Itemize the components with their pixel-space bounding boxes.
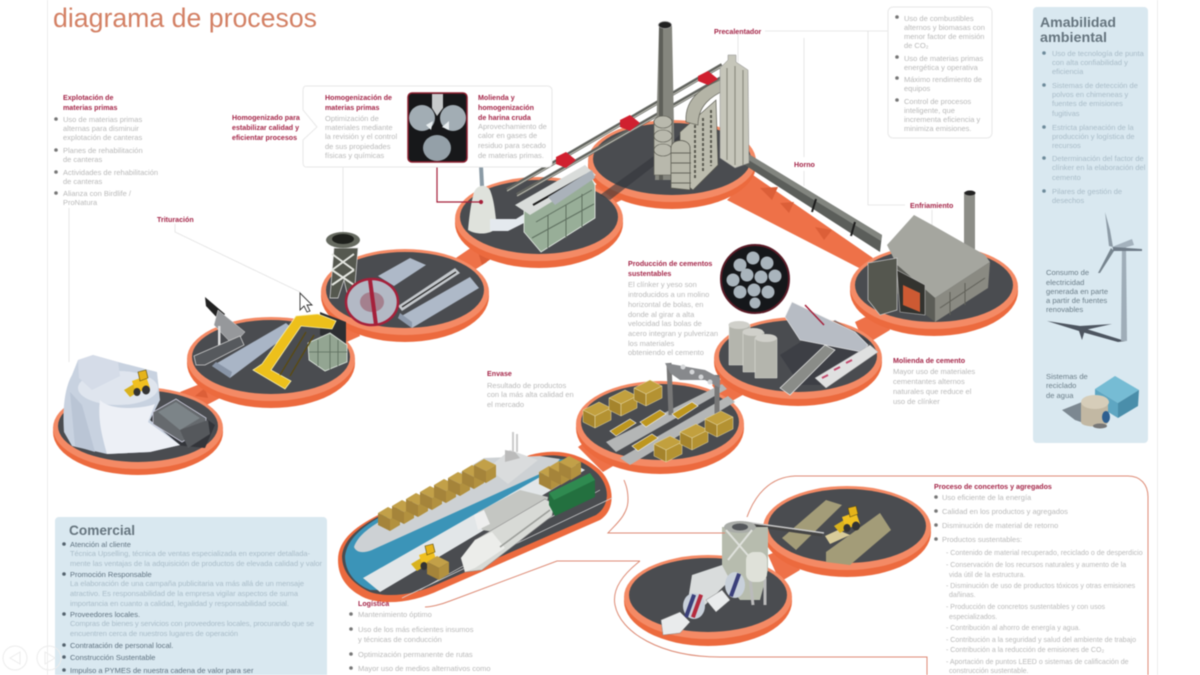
icon: player controls xyxy=(3,646,61,670)
illustration: precalentador xyxy=(600,22,749,200)
heading: horno: Horno xyxy=(794,161,816,169)
cursor xyxy=(300,293,312,312)
text: produccion: introducidos a un molino xyxy=(628,290,709,299)
panel: comercial: Compras de bienes y servicios con proveedores locales, procurando que se xyxy=(70,619,314,628)
panel: amabilidad ambiental: polvos en chimeneas y xyxy=(1052,90,1129,99)
illustration: concretos xyxy=(745,500,891,565)
panel: precalentador: Uso de combustibles xyxy=(904,14,974,23)
icon: water recycling xyxy=(1062,376,1139,428)
panel: homogenizacion: de harina cruda xyxy=(478,114,531,122)
disc: concretos xyxy=(763,486,931,577)
heading: precalentador: Precalentador xyxy=(714,28,762,36)
panel: precalentador: de CO₂ xyxy=(904,41,929,50)
text: proceso de concretos: - Aportación de puntos LEED o sistemas de calificación de xyxy=(946,659,1129,666)
panel: precalentador xyxy=(888,7,992,138)
locomotive xyxy=(461,499,554,572)
panel: amabilidad ambiental: cemento xyxy=(1052,173,1081,182)
text: proceso de concretos: - Producción de concretos sustentables y con usos xyxy=(946,604,1106,611)
inset: molino xyxy=(408,93,467,162)
panel: amabilidad ambiental: ambiental xyxy=(1040,29,1107,45)
leader lines xyxy=(69,31,932,362)
panel: amabilidad ambiental: renovables xyxy=(1046,305,1083,314)
panel: amabilidad ambiental: Uso de tecnología de punta xyxy=(1052,49,1145,58)
icon: wind turbine xyxy=(1047,212,1142,342)
panel: precalentador: equipos xyxy=(904,84,931,93)
text: explotacion: Alianza con Birdlife / xyxy=(63,189,132,198)
panel: amabilidad ambiental: Determinación del factor de xyxy=(1052,154,1144,163)
text: explotacion: de canteras xyxy=(63,177,102,186)
text: envase: el mercado xyxy=(487,400,524,409)
text: molienda de cemento xyxy=(893,357,975,406)
panel: precalentador: menor factor de emisión xyxy=(904,32,984,41)
tanker trucks xyxy=(478,490,548,532)
panel: amabilidad ambiental: recursos xyxy=(1052,141,1081,150)
panel: homogenizacion xyxy=(303,86,552,167)
disc: molienda de cemento xyxy=(714,317,882,406)
ship xyxy=(354,456,560,552)
panel: amabilidad ambiental: Sistemas de xyxy=(1046,372,1088,381)
panel: homogenizacion: Optimización de xyxy=(325,114,379,123)
forklift xyxy=(411,544,437,571)
panel: homogenizacion: de materias primas. xyxy=(478,151,544,160)
panel: amabilidad ambiental: eficiencia xyxy=(1052,67,1084,76)
panel: comercial: encuentren cerca de nuestros lugares de operación xyxy=(70,629,238,638)
panel: amabilidad ambiental: fuentes de emisiones xyxy=(1052,99,1123,108)
text: produccion: horizontal de bolas, en xyxy=(628,300,703,309)
text: explotacion: alternas para disminuir xyxy=(63,124,139,133)
panel: homogenizacion: Homogenización de xyxy=(325,94,392,102)
disc: explotacion xyxy=(53,387,223,475)
illustration: quarry xyxy=(63,355,215,454)
panel: amabilidad ambiental: Amabilidad xyxy=(1040,14,1116,30)
panel: comercial: Contratación de personal local. xyxy=(70,641,173,650)
panel: amabilidad ambiental xyxy=(1033,7,1148,443)
disc: trituracion xyxy=(187,317,355,408)
text: logistica: Optimización permanente de rutas xyxy=(358,650,473,659)
panel: homogenizacion: Aprovechamiento de xyxy=(478,122,547,131)
disc: cribado xyxy=(321,249,489,342)
panel: comercial: importancia en cuanto a calidad, legalidad y responsabilidad social. xyxy=(70,599,289,608)
text: proceso de concretos: vida útil de la estructura. xyxy=(949,572,1025,579)
text: proceso de concretos: Disminución de material de retorno xyxy=(942,521,1058,530)
title: diagrama de procesos xyxy=(53,3,317,33)
panel: amabilidad ambiental: Sistemas de detección de xyxy=(1052,81,1138,90)
text: proceso de concretos: construcción sustentable. xyxy=(949,668,1029,675)
illustration: molienda cruda xyxy=(468,65,723,252)
text: proceso de concretos: - Contribución al ahorro de energía y agua. xyxy=(946,625,1080,632)
flow arrows on connectors xyxy=(195,187,832,398)
panel: precalentador: alternos y biomasas con xyxy=(904,23,985,32)
panel: comercial: mente las ventajas de la adquisición de productos de elevada calidad y valor xyxy=(70,559,322,568)
text: envase: Envase xyxy=(487,370,512,378)
panel: comercial: Comercial xyxy=(69,522,135,538)
text: envase: con la más alta calidad en xyxy=(487,390,574,399)
text: explotacion: de canteras xyxy=(63,155,102,164)
heading: enfriamiento: Enfriamiento xyxy=(910,202,954,210)
panel: amabilidad ambiental: reciclado xyxy=(1046,381,1076,390)
red pointers xyxy=(437,162,482,204)
panel: comercial: Proveedores locales. xyxy=(70,610,140,619)
panel: amabilidad ambiental: Pilares de gestión de xyxy=(1052,187,1122,196)
illustration: enfriamiento xyxy=(868,190,990,322)
text: explotacion: Uso de materias primas xyxy=(63,115,142,124)
text: molienda de cemento: cementantes alternos xyxy=(893,377,965,386)
text: molienda de cemento: Mayor uso de materiales xyxy=(893,367,975,376)
orange connector necks xyxy=(180,172,890,582)
text: explotacion: ProNatura xyxy=(63,198,98,207)
panel: amabilidad ambiental: Consumo de xyxy=(1046,268,1089,277)
icon: bulldozer xyxy=(124,370,150,397)
text: explotacion: materias primas xyxy=(63,104,117,112)
panel: homogenizacion: físicas y químicas xyxy=(325,151,384,160)
panel: comercial xyxy=(55,517,327,675)
red clips xyxy=(556,71,718,168)
illustration: envase xyxy=(583,363,735,465)
panel: precalentador: Uso de materias primas xyxy=(904,54,983,63)
panel: homogenizacion: la revisión y el control xyxy=(325,132,397,141)
text: explotacion: explotación de canteras xyxy=(63,133,142,142)
panel: amabilidad ambiental: producción y logística de xyxy=(1052,132,1135,141)
text: envase: Resultado de productos xyxy=(487,381,566,390)
panel: homogenizacion: Molienda y xyxy=(478,94,515,102)
text: produccion: donde al girar a alta xyxy=(628,310,695,319)
text: proceso de concretos: - Disminución de uso de productos tóxicos y otras emisiones xyxy=(946,583,1136,590)
panel: comercial: Técnica Upselling, técnica de ventas especializada en exponer detallada- xyxy=(70,549,310,558)
text: logistica: Mayor uso de medios alternativos como xyxy=(358,664,491,673)
text: produccion: sustentables xyxy=(628,270,671,278)
panel: amabilidad ambiental: de agua xyxy=(1046,391,1074,400)
text: produccion: Producción de cementos xyxy=(628,260,712,268)
text: explotacion: Planes de rehabilitación xyxy=(63,146,143,155)
panel: homogenizacion: homogenización xyxy=(478,104,534,112)
illustration: trituracion xyxy=(194,297,347,389)
text: envase xyxy=(487,370,574,409)
text: logistica: y técnicas de conducción xyxy=(358,635,442,644)
text: produccion: acero integran y pulverizan xyxy=(628,329,718,338)
illustration: mezcladoras xyxy=(661,521,768,635)
panel: precalentador: Máximo rendimiento de xyxy=(904,75,982,84)
outline: concretos xyxy=(425,476,1148,675)
panel: amabilidad ambiental: Estricta planeación de la xyxy=(1052,123,1135,132)
panel: precalentador: energética y operativa xyxy=(904,63,979,72)
heading: homogenizado xyxy=(232,114,300,142)
text: proceso de concretos: dañinas. xyxy=(949,592,976,599)
text: proceso de concretos xyxy=(934,483,1143,675)
text: proceso de concretos: - Conservación de los recursos naturales y aumento de la xyxy=(946,562,1126,569)
text: molienda de cemento: naturales que reduce el xyxy=(893,387,972,396)
text: proceso de concretos: Calidad en los productos y agregados xyxy=(942,507,1068,516)
panel: homogenizacion: materias primas xyxy=(325,104,379,112)
disc: precalentador xyxy=(588,120,756,209)
text: proceso de concretos: - Contenido de material recuperado, reciclado o de desperdicio xyxy=(946,550,1143,557)
text: logistica: Mantenimiento óptimo xyxy=(358,610,432,619)
panel: amabilidad ambiental: fugitivas xyxy=(1052,109,1080,118)
text: produccion xyxy=(628,260,718,357)
illustration: cribado xyxy=(326,232,479,328)
heading: homogenizado: Homogenizado para xyxy=(232,114,300,122)
panel: homogenizacion: de sus propiedades xyxy=(325,142,391,151)
panel: comercial: Construcción Sustentable xyxy=(70,653,155,662)
text: proceso de concretos: Proceso de concertos y agregados xyxy=(934,483,1052,491)
panel: homogenizacion: calor en gases de xyxy=(478,131,537,140)
container xyxy=(549,473,595,516)
disc: molienda cruda xyxy=(455,177,623,268)
text: produccion: los materiales xyxy=(628,339,675,348)
text: proceso de concretos: Productos sustentables: xyxy=(942,535,1022,544)
panel: amabilidad ambiental: desechos xyxy=(1052,196,1084,205)
panel: comercial: Promoción Responsable xyxy=(70,570,152,579)
text: produccion: El clínker y yeso son xyxy=(628,280,697,289)
text: proceso de concretos: - Contribución a la seguridad y salud del ambiente de trabajo xyxy=(946,637,1136,644)
disc: mezcladoras xyxy=(624,555,792,646)
illustration: molienda de cemento xyxy=(728,302,878,395)
text: molienda de cemento: uso de clínker xyxy=(893,397,940,406)
text: explotacion: Actividades de rehabilitación xyxy=(63,168,158,177)
panel: comercial: Atención al cliente xyxy=(70,540,131,549)
illustration: kiln tube xyxy=(737,147,882,252)
panel: precalentador: Control de procesos xyxy=(904,97,971,106)
panel: comercial: La elaboración de una campaña publicitaria va más allá de un mensaje xyxy=(70,579,304,588)
disc: logistica xyxy=(338,432,612,602)
heading: homogenizado: estabilizar calidad y xyxy=(232,124,299,132)
text: proceso de concretos: Uso eficiente de la energía xyxy=(942,493,1032,502)
panel: comercial: Impulso a PYMES de nuestra cadena de valor para ser xyxy=(70,666,254,675)
panel: amabilidad ambiental: a partir de fuentes xyxy=(1046,296,1107,305)
panel: amabilidad ambiental: clínker en la elaboración del xyxy=(1052,163,1146,172)
text: explotacion xyxy=(54,94,158,207)
panel: amabilidad ambiental: electricidad xyxy=(1046,278,1084,287)
text: logistica xyxy=(349,600,491,673)
panel: precalentador: minimiza emisiones. xyxy=(904,124,972,133)
panel: precalentador: inteligente, que xyxy=(904,106,955,115)
panel: amabilidad ambiental: con alta confiabilidad y xyxy=(1052,58,1128,67)
panel: precalentador: incrementa eficiencia y xyxy=(904,115,981,124)
heading: trituracion: Trituración xyxy=(157,216,194,224)
disc: envase xyxy=(576,381,744,474)
panel: comercial: atractivo. Es responsabilidad de la empresa vigilar aspectos de suma xyxy=(70,589,299,598)
panel: homogenizacion: materiales mediante xyxy=(325,123,393,132)
text: logistica: Uso de los más eficientes insumos xyxy=(358,625,474,634)
panel: homogenizacion: residuo para secado xyxy=(478,141,546,150)
text: produccion: velocidad las bolas de xyxy=(628,319,702,328)
text: logistica: Logística xyxy=(358,600,389,608)
heading: homogenizado: eficientar procesos xyxy=(232,134,297,142)
text: proceso de concretos: - Contribución a la reducción de emisiones de CO₂ xyxy=(946,647,1105,654)
panel: amabilidad ambiental: generada en parte xyxy=(1046,287,1108,296)
text: molienda de cemento: Molienda de cemento xyxy=(893,357,966,365)
text: produccion: obteniendo el cemento xyxy=(628,348,704,357)
disc: enfriamiento xyxy=(850,245,1018,336)
text: explotacion: Explotación de xyxy=(63,94,114,102)
inset: ball mill xyxy=(721,245,789,313)
text: proceso de concretos: especializados. xyxy=(949,614,997,621)
